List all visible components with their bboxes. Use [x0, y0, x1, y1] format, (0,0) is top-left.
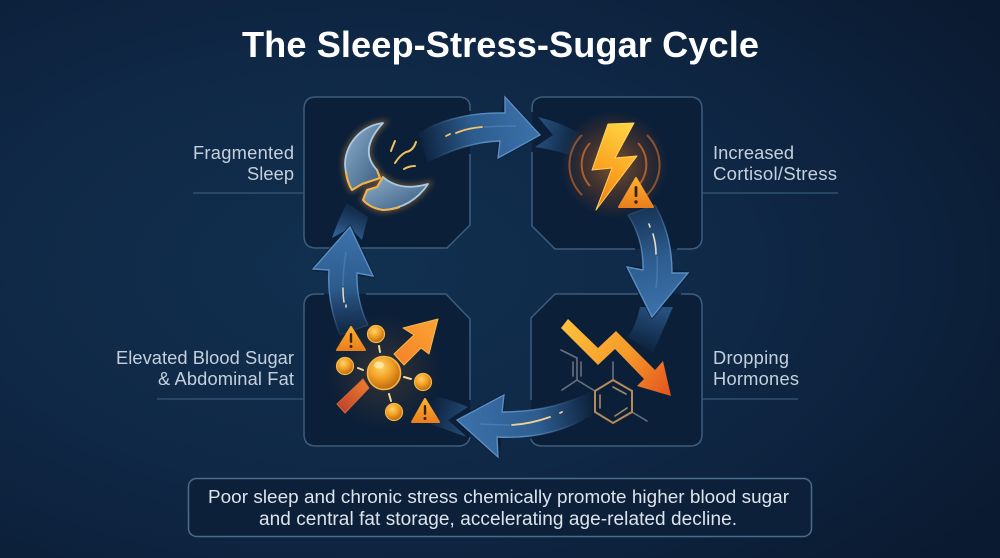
panel: increased cortisol: [532, 97, 702, 249]
arrow: sleep to cortisol: [418, 97, 579, 162]
icon: cracked moon: [345, 123, 428, 210]
callout: Poor sleep and chronic stress chemically promote higher blood sugar: [208, 487, 789, 508]
arrow: blood sugar to sleep: [313, 203, 373, 335]
label: fragmented sleep: Fragmented: [193, 142, 294, 163]
icon: rising arrow: [394, 319, 438, 365]
icon: lightning bolt: [560, 111, 668, 219]
panel: dropping hormones: [531, 294, 702, 446]
icon: warning triangle upper: [337, 327, 365, 350]
title: The Sleep-Stress-Sugar Cycle: [242, 24, 759, 65]
label: dropping hormones: Hormones: [713, 368, 799, 389]
callout: [188, 478, 812, 536]
label: fragmented sleep: [193, 142, 304, 193]
label: increased cortisol: [702, 142, 838, 193]
callout: and central fat storage, accelerating age-related decline.: [259, 509, 737, 530]
panel: fragmented sleep: [304, 97, 470, 248]
label: increased cortisol: Cortisol/Stress: [713, 163, 837, 184]
icon: blood sugar molecule: [326, 314, 442, 430]
icon: red bar: [337, 379, 369, 413]
icon: warning triangle: [619, 178, 653, 207]
icon: falling zigzag arrow: [561, 319, 671, 396]
label: elevated blood sugar: [116, 347, 304, 399]
panel: elevated blood sugar: [304, 294, 470, 446]
icon: moon sparks: [391, 141, 416, 169]
label: elevated blood sugar: & Abdominal Fat: [158, 368, 294, 389]
label: fragmented sleep: Sleep: [247, 163, 294, 184]
label: dropping hormones: [702, 347, 799, 399]
label: increased cortisol: Increased: [713, 142, 794, 163]
icon: hormone molecule: [561, 350, 647, 423]
icon: warning triangle lower: [412, 399, 439, 422]
arrow: cortisol to hormones: [627, 205, 688, 353]
arrow: hormones to blood sugar: [427, 390, 593, 457]
label: dropping hormones: Dropping: [713, 347, 789, 368]
label: elevated blood sugar: Elevated Blood Sugar: [116, 347, 294, 368]
